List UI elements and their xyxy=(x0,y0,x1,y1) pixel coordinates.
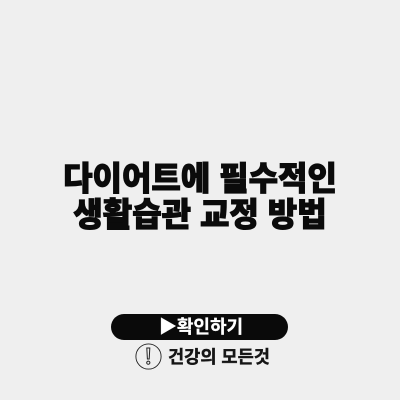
title: 생활습관 교정 방법 xyxy=(73,196,327,233)
brand text: 건강의 모든것 xyxy=(168,347,270,367)
button: confirm: ▶확인하기 xyxy=(159,317,243,337)
icon: exclamation circle xyxy=(135,344,162,370)
button: confirm xyxy=(111,314,288,340)
title xyxy=(63,160,337,233)
title: 다이어트에 필수적인 xyxy=(63,160,337,197)
